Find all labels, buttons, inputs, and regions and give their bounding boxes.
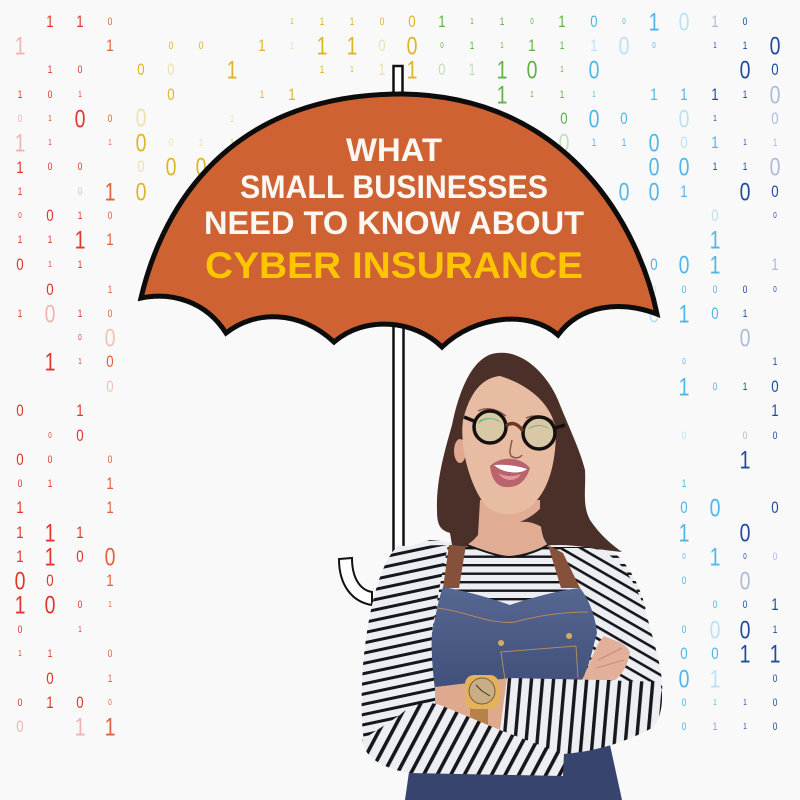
apron straps — [443, 545, 580, 588]
binary code rain: light blue columns: 0 — [680, 499, 688, 517]
binary code rain: green columns: 1 — [468, 61, 476, 79]
binary code rain: light blue columns: 0 — [713, 381, 718, 393]
binary code rain: navy columns: 0 — [743, 284, 748, 296]
binary code rain: gold columns: 0 — [167, 86, 175, 104]
binary code rain: red columns: 1 — [48, 64, 52, 76]
binary code rain: light blue columns: 1 — [713, 721, 717, 733]
binary code rain: orange columns: 0 — [106, 378, 114, 396]
shirt torso — [375, 540, 646, 700]
binary code rain: navy columns: 0 — [771, 61, 779, 79]
binary code rain: gold columns — [136, 13, 417, 206]
binary code rain: navy columns: 0 — [743, 599, 748, 611]
binary code rain: light blue columns — [589, 8, 720, 733]
binary code rain: light blue columns: 1 — [650, 86, 658, 104]
binary code rain: light blue columns: 1 — [680, 183, 688, 201]
binary code rain: light blue columns: 1 — [592, 137, 596, 149]
binary code rain: red columns: 1 — [78, 259, 82, 271]
binary code rain: navy columns: 0 — [740, 616, 750, 644]
binary code rain: navy columns: 0 — [740, 567, 750, 595]
binary code rain: navy columns: 1 — [773, 624, 777, 636]
binary code rain: red columns: 1 — [78, 626, 82, 634]
binary code rain: navy columns: 0 — [773, 286, 777, 294]
binary code rain: navy columns: 0 — [771, 378, 779, 396]
binary code rain: navy columns: 0 — [773, 430, 778, 442]
binary code rain: green columns: 0 — [559, 129, 569, 157]
binary code rain: navy columns: 0 — [740, 178, 750, 206]
binary code rain: red columns: 1 — [15, 32, 25, 60]
wristwatch — [465, 675, 499, 726]
binary code rain: gold columns: 1 — [350, 66, 354, 74]
binary code rain: red columns: 0 — [16, 402, 24, 420]
binary code rain: gold columns: 1 — [347, 32, 357, 60]
binary code rain: green columns: 1 — [528, 37, 536, 55]
binary code rain: gold columns: 1 — [317, 32, 327, 60]
shirt collar — [467, 545, 548, 557]
binary code rain: light blue columns: 1 — [679, 300, 689, 328]
binary code rain: navy columns: 0 — [771, 499, 779, 517]
eyebrows and nose — [478, 409, 554, 458]
binary code rain: navy columns: 0 — [770, 153, 780, 181]
binary code rain: green columns: 1 — [560, 66, 564, 74]
binary code rain: red columns: 0 — [45, 300, 55, 328]
binary code rain: navy columns: 1 — [711, 13, 719, 31]
binary code rain: red columns: 1 — [46, 13, 54, 31]
binary code rain: light blue columns: 0 — [682, 624, 687, 636]
binary code rain: light blue columns: 1 — [710, 665, 720, 693]
binary code rain: navy columns: 1 — [771, 256, 779, 274]
binary code rain: red columns: 0 — [18, 624, 23, 636]
binary code rain: orange columns: 0 — [108, 113, 113, 125]
binary code rain: light blue columns: 1 — [710, 543, 720, 571]
binary code rain: navy columns: 1 — [743, 89, 747, 101]
binary code rain: gold columns: 0 — [378, 37, 386, 55]
binary code rain: red columns: 0 — [46, 572, 54, 590]
binary code rain: light blue columns: 0 — [679, 251, 689, 279]
binary code rain: red columns: 0 — [78, 64, 83, 76]
ear — [454, 439, 466, 463]
binary code rain: red columns: 0 — [18, 113, 23, 125]
binary code rain: red columns: 1 — [16, 159, 24, 177]
binary code rain: red columns: 0 — [76, 427, 84, 445]
title — [204, 132, 584, 286]
binary code rain: light blue columns: 0 — [711, 645, 719, 663]
binary code rain: orange columns: 0 — [108, 308, 113, 320]
binary code rain: green columns: 1 — [470, 40, 474, 52]
binary code rain: light blue columns: 0 — [619, 32, 629, 60]
binary code rain: gold columns: 0 — [166, 153, 176, 181]
binary code rain: red columns: 1 — [48, 139, 52, 147]
binary code rain: navy columns: 0 — [773, 697, 778, 709]
binary code rain: light blue columns: 0 — [589, 105, 599, 133]
binary code rain: light blue columns: 0 — [649, 300, 659, 328]
title: NEED TO KNOW ABOUT — [204, 205, 584, 241]
binary code rain: green columns: 1 — [560, 89, 564, 101]
binary code rain: light blue columns: 1 — [679, 373, 689, 401]
binary code rain: green columns: 1 — [560, 40, 564, 52]
binary code rain: gold columns: 0 — [407, 32, 417, 60]
binary code rain: green columns: 1 — [497, 81, 507, 109]
binary code rain: light blue columns: 0 — [652, 284, 657, 296]
binary code rain: navy columns: 1 — [743, 699, 747, 707]
binary code rain: navy columns: 1 — [773, 137, 777, 149]
binary code rain: red columns: 0 — [46, 281, 54, 299]
binary code rain: light blue columns: 0 — [652, 42, 656, 50]
binary code rain: red columns: 1 — [15, 129, 25, 157]
face — [462, 376, 556, 514]
apron lower — [405, 745, 622, 800]
binary code rain: red columns: 1 — [18, 308, 22, 320]
binary code rain: red columns: 0 — [48, 161, 53, 173]
binary code rain: orange columns — [105, 16, 115, 741]
binary code rain: gold columns: 1 — [290, 18, 294, 26]
apron bib — [432, 587, 597, 690]
binary code rain: gold columns: 0 — [137, 158, 145, 176]
binary code rain: red columns: 1 — [75, 226, 85, 254]
binary code rain: gold columns: 1 — [320, 16, 324, 28]
binary code rain: red columns: 1 — [78, 358, 82, 366]
binary code rain: light blue columns: 1 — [649, 8, 659, 36]
binary code rain: light blue columns: 0 — [713, 284, 718, 296]
binary code rain: gold columns: 0 — [169, 40, 174, 52]
binary code rain: gold columns: 1 — [227, 56, 237, 84]
binary code rain: gold columns: 0 — [196, 153, 206, 181]
umbrella canopy — [141, 94, 657, 347]
binary code rain: light blue columns: 1 — [680, 86, 688, 104]
binary code rain: red columns: 0 — [45, 591, 55, 619]
binary code rain: orange columns: 1 — [106, 37, 114, 55]
binary code rain: light blue columns: 0 — [682, 697, 687, 709]
title: SMALL BUSINESSES — [240, 169, 548, 205]
binary code rain: green columns: 1 — [500, 16, 504, 28]
pocket rivets — [498, 633, 572, 646]
binary code rain: red columns: 0 — [76, 548, 84, 566]
binary code rain: light blue columns: 0 — [713, 599, 718, 611]
binary code rain: gold columns: 1 — [378, 61, 386, 79]
binary code rain: red columns: 1 — [18, 186, 22, 198]
binary code rain: red columns: 0 — [16, 451, 24, 469]
binary code rain: gold columns: 1 — [288, 86, 296, 104]
binary code rain: gold columns: 1 — [260, 89, 264, 101]
binary code rain: gold columns: 1 — [407, 56, 417, 84]
binary code rain: light blue columns: 0 — [680, 134, 688, 152]
binary code rain: light blue columns: 1 — [590, 37, 598, 55]
binary code rain: orange columns: 1 — [108, 284, 112, 296]
binary code rain: navy columns: 1 — [773, 356, 777, 368]
binary code rain: light blue columns: 0 — [590, 13, 598, 31]
binary code rain: orange columns: 1 — [106, 231, 114, 249]
binary code rain: green columns: 0 — [560, 110, 568, 128]
binary code rain: red columns: 1 — [48, 234, 52, 246]
binary code rain: light blue columns: 0 — [682, 575, 687, 587]
apron stitching and pocket — [437, 608, 588, 680]
binary code rain: navy columns: 0 — [740, 324, 750, 352]
binary code rain: orange columns: 1 — [108, 601, 112, 609]
binary code rain: light blue columns: 0 — [620, 110, 628, 128]
binary code rain: red columns: 1 — [46, 694, 54, 712]
binary code rain: gold columns: 1 — [350, 16, 354, 28]
binary code rain: navy columns: 0 — [771, 183, 779, 201]
binary code rain: light blue columns: 0 — [711, 207, 719, 225]
binary code rain: orange columns: 0 — [106, 353, 114, 371]
binary code rain: light blue columns: 0 — [682, 284, 687, 296]
binary code rain: orange columns: 1 — [106, 572, 114, 590]
binary code rain: gold columns: 0 — [408, 13, 416, 31]
binary code rain: red columns: 0 — [15, 567, 25, 595]
binary code rain: red columns: 0 — [48, 432, 52, 440]
binary code rain: navy columns: 1 — [743, 139, 747, 147]
binary code rain: green columns: 0 — [440, 42, 444, 50]
binary code rain: gold columns: 0 — [136, 104, 146, 132]
binary code rain: gold columns: 1 — [230, 113, 234, 125]
binary code rain: red columns: 0 — [16, 256, 24, 274]
binary code rain: navy columns: 1 — [713, 161, 717, 173]
binary code rain: gold columns: 0 — [380, 16, 385, 28]
binary code rain: navy columns: 1 — [740, 446, 750, 474]
binary code rain: red columns: 1 — [48, 648, 52, 660]
binary code rain: navy columns: 1 — [743, 381, 747, 393]
binary code rain: gold columns: 0 — [136, 178, 146, 206]
binary code rain: light blue columns: 1 — [711, 134, 719, 152]
binary code rain: light blue columns: 0 — [619, 178, 629, 206]
binary code rain: navy columns: 0 — [773, 673, 778, 685]
binary code rain: light blue columns: 1 — [679, 519, 689, 547]
binary code rain: red columns: 1 — [16, 524, 24, 542]
binary code rain: light blue columns: 0 — [679, 153, 689, 181]
binary code rain: red columns: 0 — [78, 334, 82, 342]
binary code rain: light blue columns: 0 — [589, 56, 599, 84]
binary code rain: red columns: 0 — [75, 105, 85, 133]
binary code rain: red columns — [15, 13, 85, 741]
glasses — [464, 411, 565, 449]
binary code rain: light blue columns: 0 — [680, 645, 688, 663]
binary code rain: light blue columns: 1 — [622, 137, 626, 149]
binary code rain: orange columns: 0 — [108, 210, 113, 222]
binary code rain: navy columns: 0 — [740, 56, 750, 84]
binary code rain: gold columns: 0 — [167, 61, 175, 79]
binary code rain: orange columns: 0 — [105, 324, 115, 352]
binary code rain: red columns: 0 — [16, 718, 24, 736]
binary code rain: navy columns: 0 — [773, 721, 778, 733]
binary code rain: light blue columns: 0 — [622, 18, 626, 26]
binary code rain: gold columns: 1 — [230, 139, 234, 147]
binary code rain: gold columns: 1 — [258, 37, 266, 55]
binary code rain: navy columns: 1 — [711, 86, 719, 104]
woman — [362, 353, 662, 800]
umbrella pole — [394, 320, 404, 560]
binary code rain: navy columns: 1 — [743, 161, 747, 173]
title: WHAT — [346, 132, 442, 168]
binary code rain: navy columns: 0 — [770, 81, 780, 109]
binary code rain: light blue columns: 1 — [682, 478, 686, 490]
binary code rain: navy columns: 1 — [771, 596, 779, 614]
left sleeve — [362, 545, 448, 770]
upper folded forearm — [500, 678, 662, 754]
binary code rain: navy columns: 1 — [770, 640, 780, 668]
binary code rain: navy columns: 1 — [740, 640, 750, 668]
mouth — [490, 459, 530, 487]
binary code rain: red columns: 0 — [76, 694, 84, 712]
binary code rain: light blue columns: 0 — [649, 153, 659, 181]
binary code rain: gold columns: 0 — [199, 40, 204, 52]
binary code rain: light blue columns: 1 — [592, 91, 596, 99]
binary code rain: green columns: 0 — [438, 61, 446, 79]
binary code rain: light blue columns: 1 — [710, 251, 720, 279]
binary code rain: red columns: 1 — [18, 234, 22, 246]
binary code rain: red columns: 1 — [16, 548, 24, 566]
binary code rain: red columns: 0 — [46, 207, 54, 225]
binary code rain: red columns: 1 — [76, 402, 84, 420]
binary code rain: gold columns: 1 — [320, 64, 324, 76]
binary code rain: red columns: 1 — [75, 713, 85, 741]
binary code rain: light blue columns: 0 — [682, 358, 686, 366]
binary code rain: red columns: 1 — [45, 348, 55, 376]
binary code rain: red columns: 1 — [78, 308, 82, 320]
binary code rain: light blue columns: 0 — [710, 616, 720, 644]
binary code rain: light blue columns: 0 — [682, 721, 687, 733]
binary code rain: navy columns: 1 — [743, 723, 747, 731]
binary code rain: light blue columns: 0 — [711, 305, 719, 323]
binary code rain: orange columns: 0 — [108, 648, 113, 660]
binary code rain: navy columns: 1 — [771, 402, 779, 420]
binary code rain: red columns: 0 — [48, 89, 53, 101]
binary code rain: navy columns: 1 — [713, 115, 717, 123]
binary code rain: orange columns: 1 — [108, 139, 112, 147]
binary code rain: red columns: 1 — [76, 13, 84, 31]
binary code rain: green columns: 1 — [558, 13, 566, 31]
binary code rain: red columns: 1 — [48, 115, 52, 123]
binary code rain: light blue columns: 0 — [649, 178, 659, 206]
binary code rain: orange columns: 0 — [108, 16, 113, 28]
binary code rain: red columns: 1 — [48, 478, 52, 490]
binary code rain: navy columns: 0 — [743, 430, 748, 442]
binary code rain: light blue columns: 0 — [649, 129, 659, 157]
binary code rain: light blue columns: 0 — [710, 494, 720, 522]
neck — [467, 500, 548, 557]
binary code rain: green columns: 1 — [530, 91, 534, 99]
binary code rain: green columns: 1 — [497, 56, 507, 84]
umbrella handle — [339, 558, 372, 605]
binary code rain: gold columns: 0 — [169, 137, 174, 149]
binary code rain: red columns: 0 — [78, 186, 83, 198]
binary code rain: navy columns: 1 — [743, 308, 747, 320]
binary code rain: red columns: 0 — [46, 670, 54, 688]
binary code rain: red columns: 0 — [18, 212, 22, 220]
binary code rain: green columns: 1 — [438, 13, 446, 31]
umbrella — [141, 66, 657, 605]
binary code rain: gold columns: 0 — [136, 129, 146, 157]
title: CYBER INSURANCE — [205, 245, 583, 286]
binary code rain: orange columns: 1 — [106, 499, 114, 517]
binary code rain: navy columns: 0 — [770, 32, 780, 60]
binary code rain: red columns: 0 — [78, 161, 83, 173]
binary code rain: red columns: 1 — [16, 499, 24, 517]
binary code rain: light blue columns: 1 — [713, 699, 717, 707]
hair — [437, 353, 622, 552]
binary code rain: navy columns — [711, 13, 780, 733]
binary code rain: orange columns: 1 — [105, 713, 115, 741]
binary code rain: light blue columns: 0 — [679, 105, 689, 133]
binary code rain: green columns: 1 — [500, 42, 504, 50]
forearm skin — [435, 678, 510, 730]
binary code rain: green columns — [438, 13, 569, 157]
binary code rain: light blue columns: 1 — [710, 226, 720, 254]
binary code rain: orange columns: 1 — [108, 673, 112, 685]
binary code rain: navy columns: 0 — [743, 16, 748, 28]
binary code rain: red columns: 0 — [18, 697, 23, 709]
binary code rain: red columns: 0 — [18, 478, 23, 490]
binary code rain: red columns: 0 — [48, 454, 53, 466]
binary code rain: red columns: 0 — [78, 599, 83, 611]
binary code rain: red columns: 1 — [45, 543, 55, 571]
binary code rain: orange columns: 1 — [105, 178, 115, 206]
binary code rain: green columns: 0 — [527, 56, 537, 84]
binary code rain: light blue columns: 0 — [679, 8, 689, 36]
binary code rain: gold columns: 1 — [199, 137, 203, 149]
binary code rain: orange columns: 0 — [108, 454, 113, 466]
binary code rain: red columns: 1 — [15, 591, 25, 619]
right sleeve — [560, 548, 662, 695]
binary code rain: light blue columns: 0 — [682, 553, 686, 561]
binary code rain: navy columns: 1 — [743, 40, 747, 52]
binary code rain: light blue columns: 0 — [682, 430, 687, 442]
binary code rain: green columns: 0 — [530, 18, 534, 26]
binary code rain: navy columns: 0 — [771, 110, 779, 128]
binary code rain: red columns: 1 — [18, 89, 22, 101]
binary code rain: gold columns: 1 — [290, 40, 294, 52]
binary code rain: red columns: 1 — [78, 91, 82, 99]
binary code rain: navy columns: 0 — [740, 519, 750, 547]
binary code rain: orange columns: 0 — [108, 699, 112, 707]
hand — [582, 636, 630, 680]
binary code rain: gold columns: 0 — [137, 61, 145, 79]
binary code rain: navy columns: 0 — [773, 551, 778, 563]
binary code rain: red columns: 1 — [18, 650, 22, 658]
binary code rain: orange columns: 1 — [106, 475, 114, 493]
binary code rain: red columns: 1 — [78, 210, 82, 222]
binary code rain: navy columns: 0 — [743, 553, 747, 561]
binary code rain: red columns: 1 — [76, 524, 84, 542]
binary code rain: navy columns: 0 — [773, 212, 777, 220]
binary code rain: navy columns: 1 — [713, 42, 717, 50]
hair strand right — [520, 455, 578, 542]
umbrella tip — [394, 66, 402, 96]
binary code rain: light blue columns: 0 — [650, 256, 658, 274]
lower folded forearm — [362, 703, 564, 776]
binary code rain: red columns: 1 — [48, 261, 52, 269]
binary code rain: red columns: 1 — [45, 519, 55, 547]
binary code rain: orange columns: 0 — [105, 543, 115, 571]
binary code rain: green columns: 1 — [470, 18, 474, 26]
binary code rain: light blue columns: 0 — [679, 665, 689, 693]
